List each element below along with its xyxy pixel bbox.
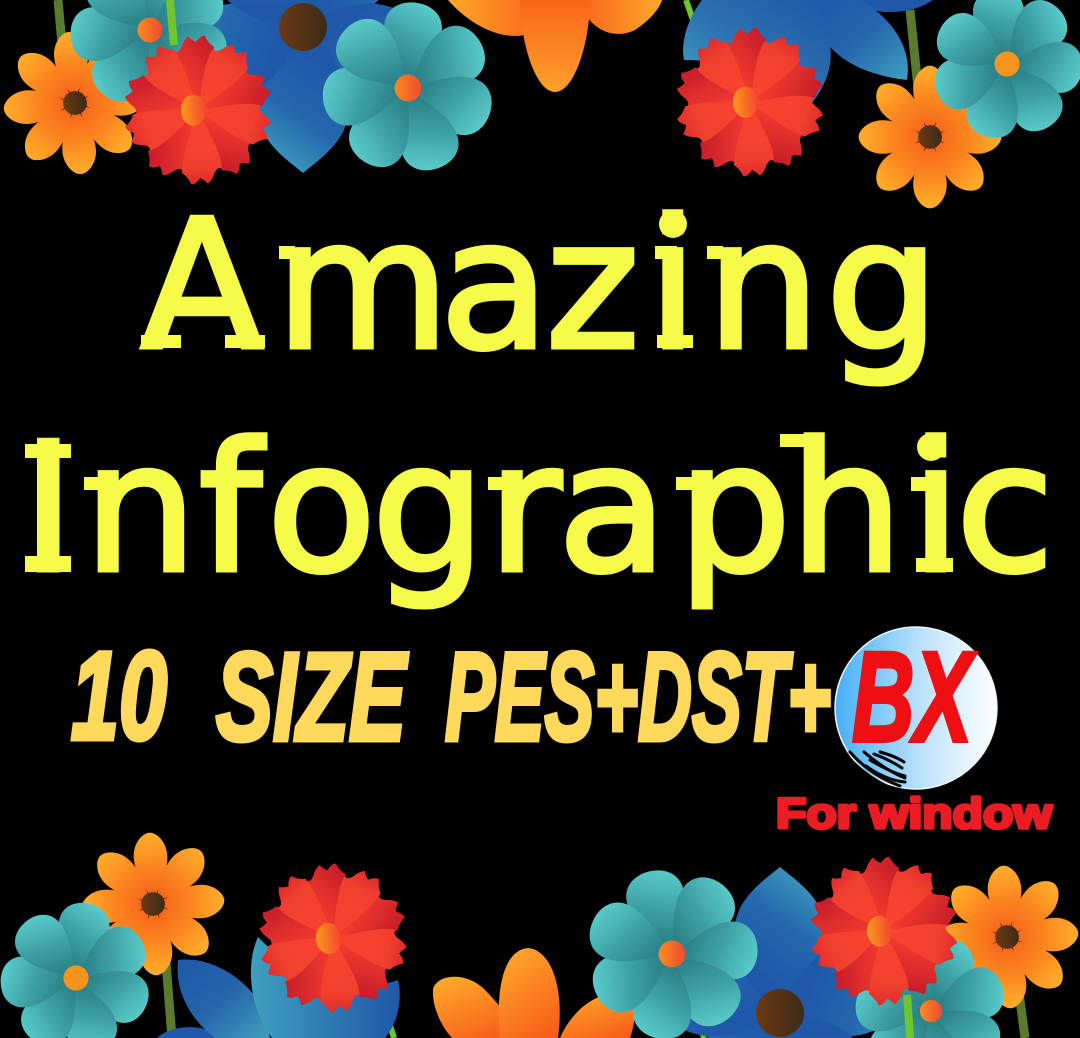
bottom flower border [0,829,1080,1038]
flower: large orange bottom centre [433,948,635,1038]
subtitle: 10 size formats [71,627,831,767]
flower: red top left [117,32,279,188]
badge circle [835,627,997,789]
caption: For window: For window [776,790,1053,838]
flower: teal top right [918,0,1080,154]
flower: orange bottom right [932,862,1080,1012]
flower: orange top right [859,66,1001,208]
flower: blue bottom left [157,937,400,1038]
stem over teal, bottom right [907,995,910,1038]
brush marks on badge [838,745,905,790]
flower: red bottom left [249,856,417,1020]
top flower border [0,0,1080,208]
badge text: BX: BX [852,626,976,769]
flower: teal top left [53,0,246,127]
BX badge [835,626,997,790]
flower: red top right [669,24,831,180]
subtitle word: 10: 10 [71,627,167,766]
flower: teal bottom right [830,913,1032,1038]
title: Amazing: Amazing [141,182,939,389]
stems, bottom border [165,950,1025,1038]
flower: teal top middle [309,0,507,187]
flower: blue top left [150,0,456,173]
flower: blue bottom right [627,867,933,1038]
flower: orange top left [0,26,152,180]
stem over teal, top left [170,0,174,45]
flower: orange bottom left [78,829,228,979]
flower: large orange top centre [448,0,662,92]
subtitle word: PES+DST+: PES+DST+ [445,628,831,767]
flower: red bottom right [802,852,966,1010]
flower: teal bottom left [0,890,167,1038]
title: Infographic: Infographic [22,405,1054,612]
subtitle word: SIZE: SIZE [216,628,408,767]
flower: teal bottom middle [563,848,783,1038]
stems, top border [58,0,918,88]
flower: blue top right [683,0,933,103]
